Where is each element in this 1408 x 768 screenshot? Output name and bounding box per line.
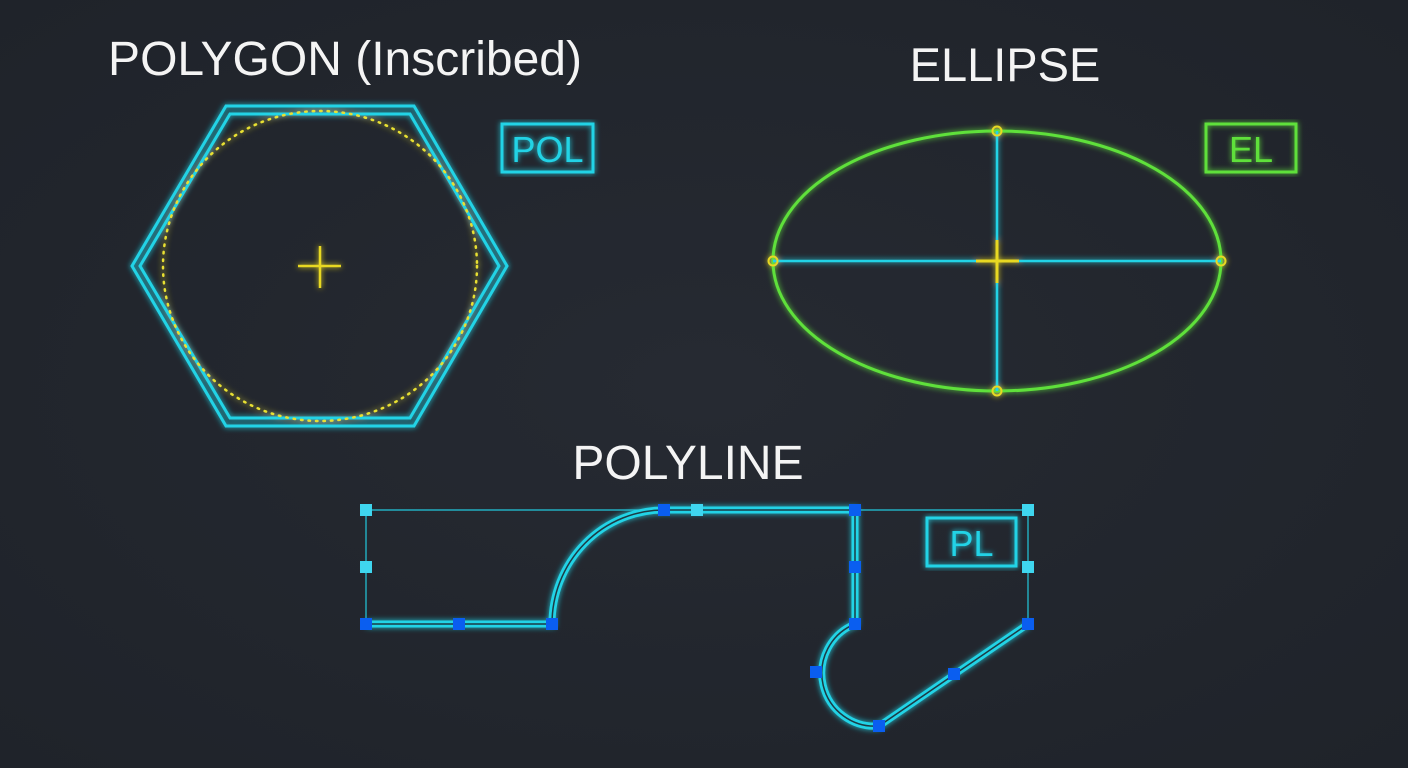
title: polyline: POLYLINE xyxy=(572,437,804,490)
center cross xyxy=(298,246,341,288)
polyline drawing xyxy=(360,504,1034,732)
label box: PL xyxy=(927,518,1016,566)
label box: EL: EL xyxy=(1229,129,1273,170)
label box: PL: PL xyxy=(949,523,994,564)
title: ellipse: ELLIPSE xyxy=(910,38,1100,91)
inscribed circle xyxy=(163,111,477,421)
grips xyxy=(360,504,1034,573)
polyline path xyxy=(366,510,1028,726)
hexagon xyxy=(132,106,507,426)
label box: EL xyxy=(1206,124,1296,172)
axes xyxy=(773,131,1221,391)
polygon drawing xyxy=(132,106,507,426)
bounding box xyxy=(366,510,1028,624)
label box: POL: POL xyxy=(511,129,584,170)
ellipse drawing xyxy=(768,126,1226,396)
quadrant points xyxy=(768,126,1226,396)
title: polygon: POLYGON (Inscribed) xyxy=(108,33,582,86)
center cross xyxy=(976,240,1019,283)
label box: POL xyxy=(502,124,593,172)
